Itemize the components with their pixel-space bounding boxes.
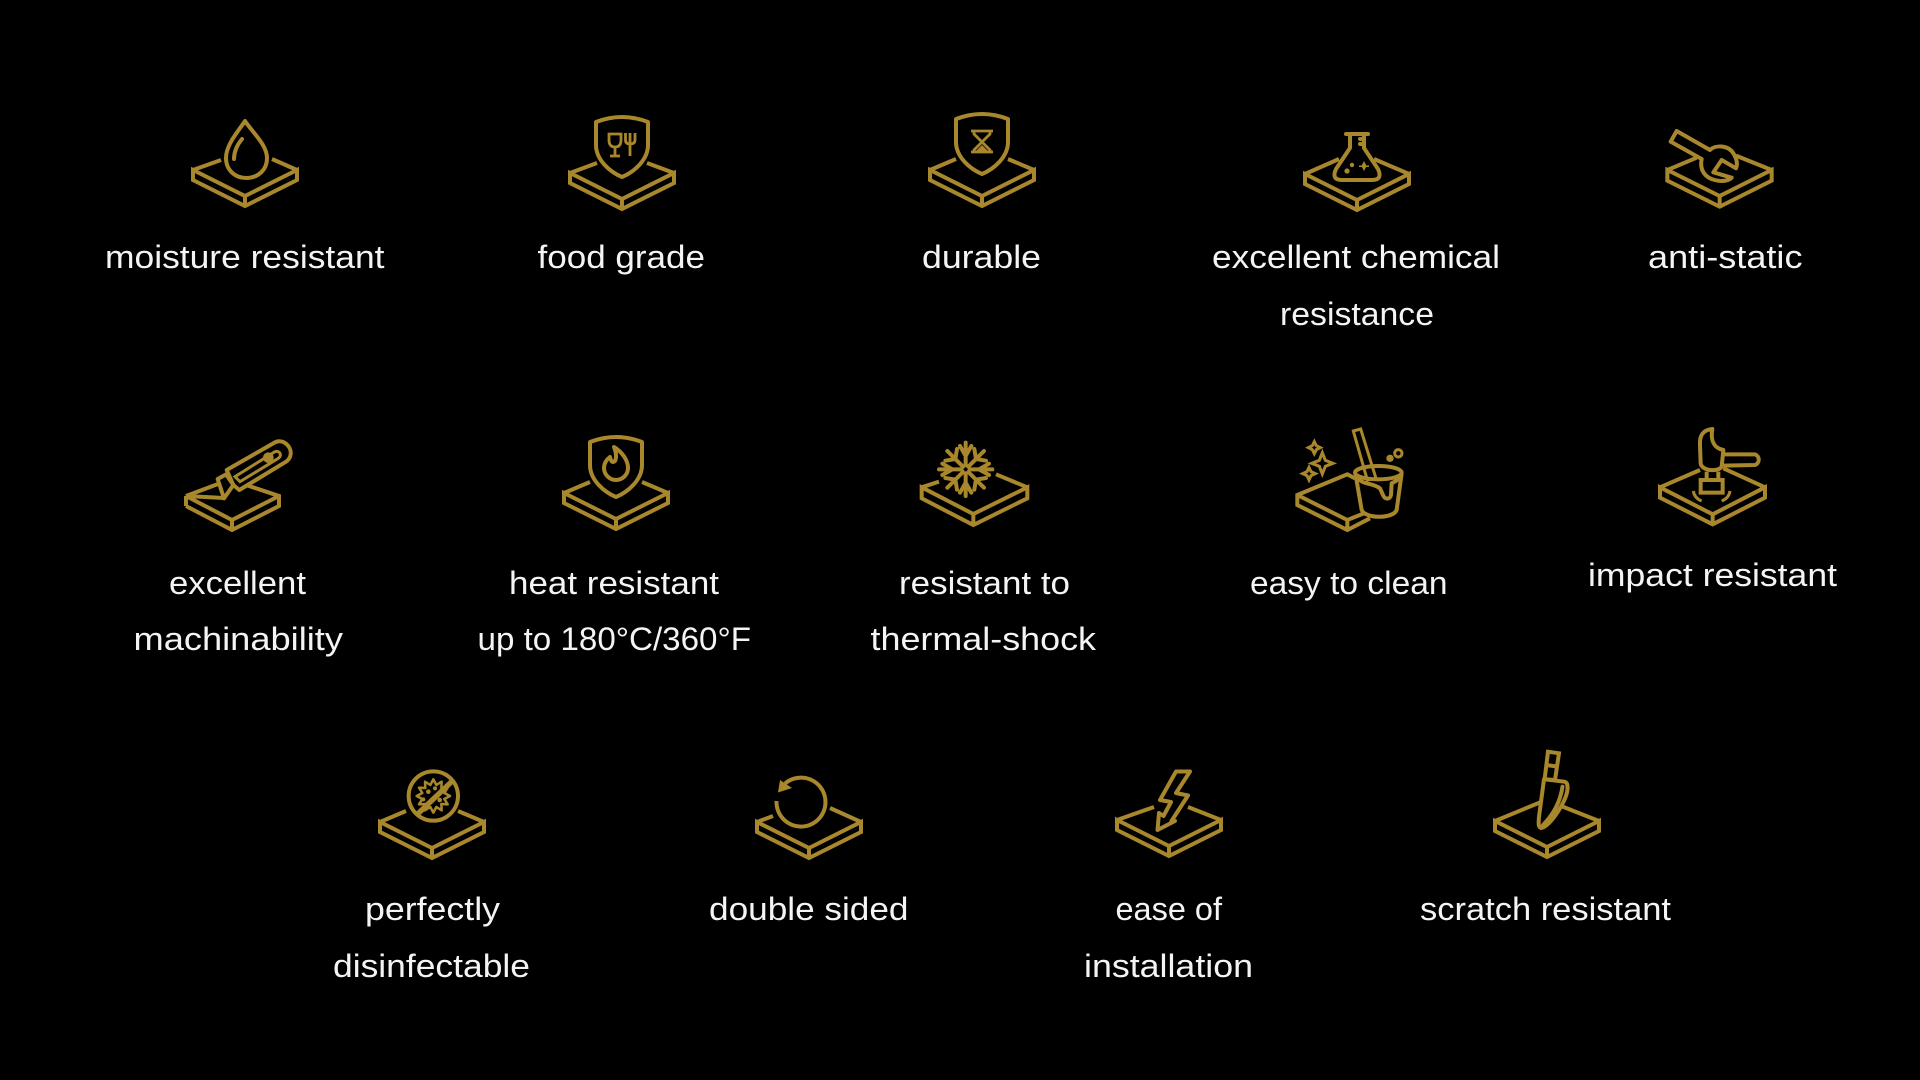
icon: shield with hourglass [930,114,1034,206]
item: ease of installation [1084,772,1253,984]
label: disinfectable [333,948,530,984]
label: anti-static [1648,239,1802,275]
item: excellent chemical resistance [1212,134,1500,332]
item: anti-static [1648,131,1802,275]
label: thermal-shock [870,621,1097,657]
icon: kitchen knife on slab [1495,752,1599,857]
icon: utility knife on slab [186,441,291,530]
label: heat resistant [509,565,719,601]
item: impact resistant [1588,429,1837,593]
label: food grade [538,239,705,275]
icon: flask on slab [1305,134,1409,210]
icon: shield with flame [564,437,668,529]
icon: rotation arrow on slab [757,778,861,858]
label: scratch resistant [1420,891,1671,927]
icon: wrench on slab [1667,131,1772,207]
item: perfectly disinfectable [333,771,530,984]
item: double sided [709,778,908,927]
item: excellent machinability [134,441,344,657]
label: easy to clean [1250,565,1448,601]
item: easy to clean [1250,429,1448,601]
icon: hammer on slab [1660,429,1765,524]
icon: lightning bolt on slab [1117,772,1221,856]
icon: bucket, brush and sparkles [1297,429,1402,530]
label: perfectly [365,891,501,927]
label: impact resistant [1588,557,1837,593]
label: resistant to [899,565,1070,601]
label [134,565,344,657]
icon: shield with glass and fork [570,117,674,209]
label: moisture resistant [105,239,384,275]
label [478,565,751,657]
icon: snowflake on slab [922,443,1027,525]
label: up to 180°C/360°F [478,621,751,657]
item: moisture resistant [105,121,384,275]
label: ease of [1116,891,1223,927]
label: excellent chemical [1212,239,1500,275]
item: resistant to thermal-shock [870,443,1097,657]
label: resistance [1280,296,1434,332]
label [1212,239,1500,332]
label: excellent [169,565,306,601]
item: scratch resistant [1420,752,1671,927]
label [870,565,1097,657]
label: installation [1084,948,1253,984]
label: double sided [709,891,908,927]
label: durable [922,239,1041,275]
icon: crossed-out virus on slab [380,771,484,858]
label [1084,891,1253,984]
icon: water drop on slab [193,121,297,206]
label [333,891,530,984]
label: machinability [134,621,344,657]
item: durable [922,114,1041,275]
item: heat resistant [478,437,751,657]
item: food grade [538,117,705,275]
